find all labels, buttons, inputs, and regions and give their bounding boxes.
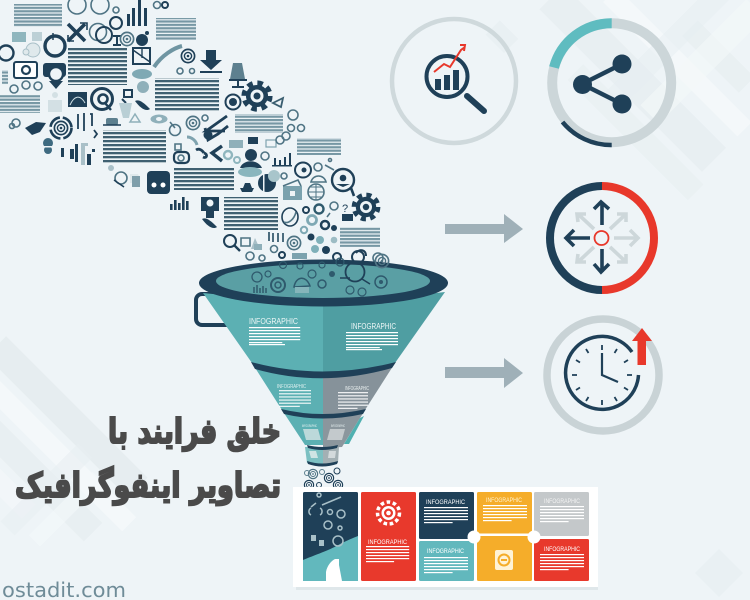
arrow: to clock icon (445, 358, 523, 388)
card: gray text (534, 492, 589, 536)
arrow: to directions icon (445, 214, 523, 243)
icons dropping below the funnel (304, 468, 343, 490)
card: gray text: INFOGRAPHIC (544, 498, 580, 505)
funnel panel label second left: INFOGRAPHIC (277, 384, 306, 390)
funnel body: top right segment (323, 292, 445, 378)
icon: clock with red arrow (547, 319, 659, 431)
card: teal text (419, 541, 474, 581)
funnel spout right (323, 447, 339, 466)
funnel body: second right segment (323, 363, 395, 416)
card: red text: INFOGRAPHIC (544, 546, 580, 553)
card: red with gear: INFOGRAPHIC (368, 539, 407, 546)
title line 2: تصاویر اینفوگرافیک (15, 466, 281, 506)
funnel body: left segments (203, 293, 323, 445)
small icons: ? (342, 203, 348, 215)
funnel panel label second right (338, 386, 369, 409)
panel: card sheet (293, 487, 598, 590)
card: navy text (419, 492, 474, 539)
funnel band 3 (307, 445, 338, 450)
background pattern: top right diagonal tiles (486, 0, 750, 597)
funnel panel label left top: INFOGRAPHIC (249, 316, 298, 326)
funnel panel label left top (249, 316, 300, 345)
funnel panel label second right: INFOGRAPHIC (345, 386, 369, 392)
card: red text (534, 539, 589, 581)
card: navy with icons (303, 492, 358, 581)
card: orange with icon (477, 536, 532, 581)
funnel body: third right segment (323, 410, 365, 448)
title line 1: خلق فرایند با (108, 412, 281, 452)
funnel band 1 (251, 362, 396, 378)
title (15, 412, 281, 506)
funnel teal edge (344, 416, 364, 444)
funnel band 2 (281, 409, 366, 418)
background pattern: bottom left diagonal tiles (0, 336, 162, 575)
icon: magnifier with growth chart (392, 19, 516, 143)
icons inside the opening (252, 254, 389, 296)
funnel panel label right top: INFOGRAPHIC (351, 321, 396, 331)
card: orange text (477, 492, 532, 534)
text blocks (0, 4, 380, 247)
icon: directions ring (550, 186, 654, 290)
funnel panel label right top (346, 321, 398, 350)
card: red with gear (361, 492, 416, 581)
icon cloud flowing into the funnel (0, 0, 383, 263)
card: orange text: INFOGRAPHIC (486, 497, 522, 504)
icon: share ring (552, 23, 671, 145)
card: teal text: INFOGRAPHIC (427, 548, 464, 555)
funnel panel label second left (277, 384, 311, 407)
small icons (0, 0, 383, 263)
funnel opening (216, 264, 430, 298)
funnel small panels: INFOGRAPHIC (302, 424, 317, 428)
funnel band 4 (307, 461, 338, 466)
funnel handle (196, 294, 232, 325)
funnel (196, 254, 448, 466)
funnel rim (199, 260, 448, 306)
card: navy text: INFOGRAPHIC (426, 499, 465, 506)
card connectors (468, 530, 540, 544)
funnel small panels: INFOGRAPHIC (331, 424, 345, 428)
funnel small panels (302, 424, 345, 458)
funnel spout (305, 447, 323, 466)
